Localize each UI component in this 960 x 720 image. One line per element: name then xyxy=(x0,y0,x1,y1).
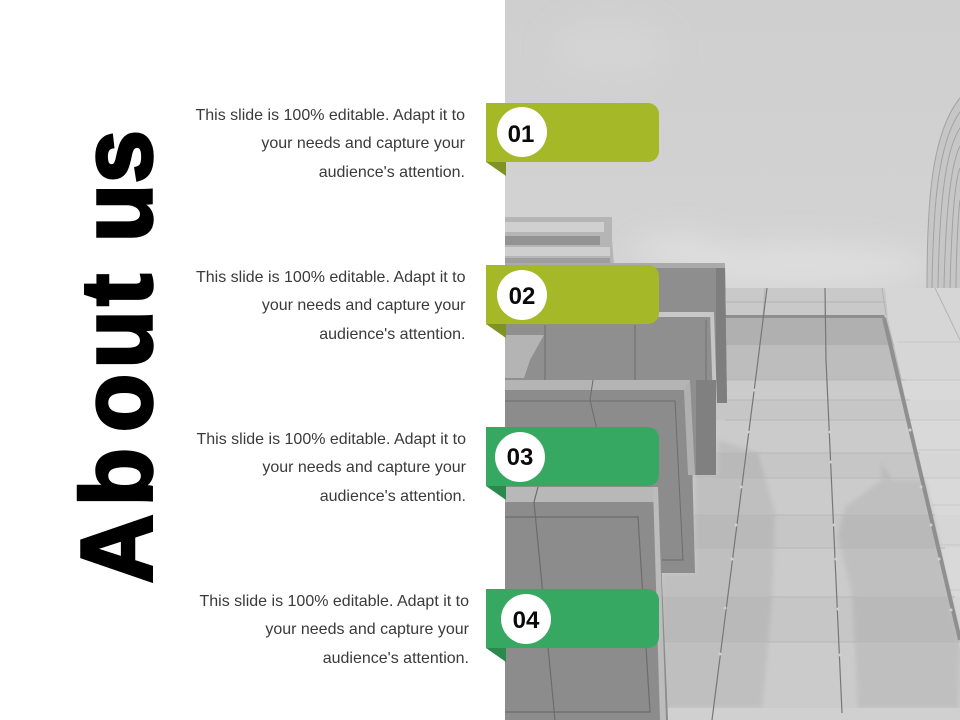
distant curved tower xyxy=(927,98,960,288)
text block 1: audience's attention. xyxy=(319,164,465,181)
label 02 xyxy=(486,265,659,338)
label 02: 02 xyxy=(509,283,535,310)
glass facade xyxy=(660,288,960,720)
title: About us: About us xyxy=(61,130,173,583)
label 03: 03 xyxy=(507,444,533,471)
text block 4: your needs and capture your xyxy=(265,621,470,638)
background photo: office building in grayscale xyxy=(505,0,960,720)
balcony three xyxy=(505,380,695,573)
facade bolts xyxy=(718,388,952,656)
small balcony detail xyxy=(505,335,544,378)
label 01 xyxy=(486,103,659,176)
text block 1 xyxy=(196,107,466,181)
text block 3: your needs and capture your xyxy=(262,459,467,476)
label 03 xyxy=(486,427,659,500)
text block 2: This slide is 100% editable. Adapt it to xyxy=(196,269,466,286)
text block 4 xyxy=(200,593,470,667)
text block 1: This slide is 100% editable. Adapt it to xyxy=(196,107,465,124)
text block 2: your needs and capture your xyxy=(262,297,466,314)
label 04 xyxy=(486,589,659,662)
text block 4: This slide is 100% editable. Adapt it to xyxy=(200,593,469,610)
text block 3: audience's attention. xyxy=(320,488,466,505)
balcony two xyxy=(544,312,717,475)
text block 4: audience's attention. xyxy=(323,650,469,667)
facade cables xyxy=(712,288,960,720)
upper left balcony xyxy=(505,217,614,265)
text block 2: audience's attention. xyxy=(319,326,466,343)
balcony one xyxy=(505,263,727,403)
label 01: 01 xyxy=(508,121,534,148)
label 04: 04 xyxy=(513,607,540,634)
text block 3: This slide is 100% editable. Adapt it to xyxy=(196,431,466,448)
text block 1: your needs and capture your xyxy=(261,135,466,152)
balcony four xyxy=(505,487,668,720)
text block 3 xyxy=(196,431,467,505)
text block 2 xyxy=(196,269,466,343)
